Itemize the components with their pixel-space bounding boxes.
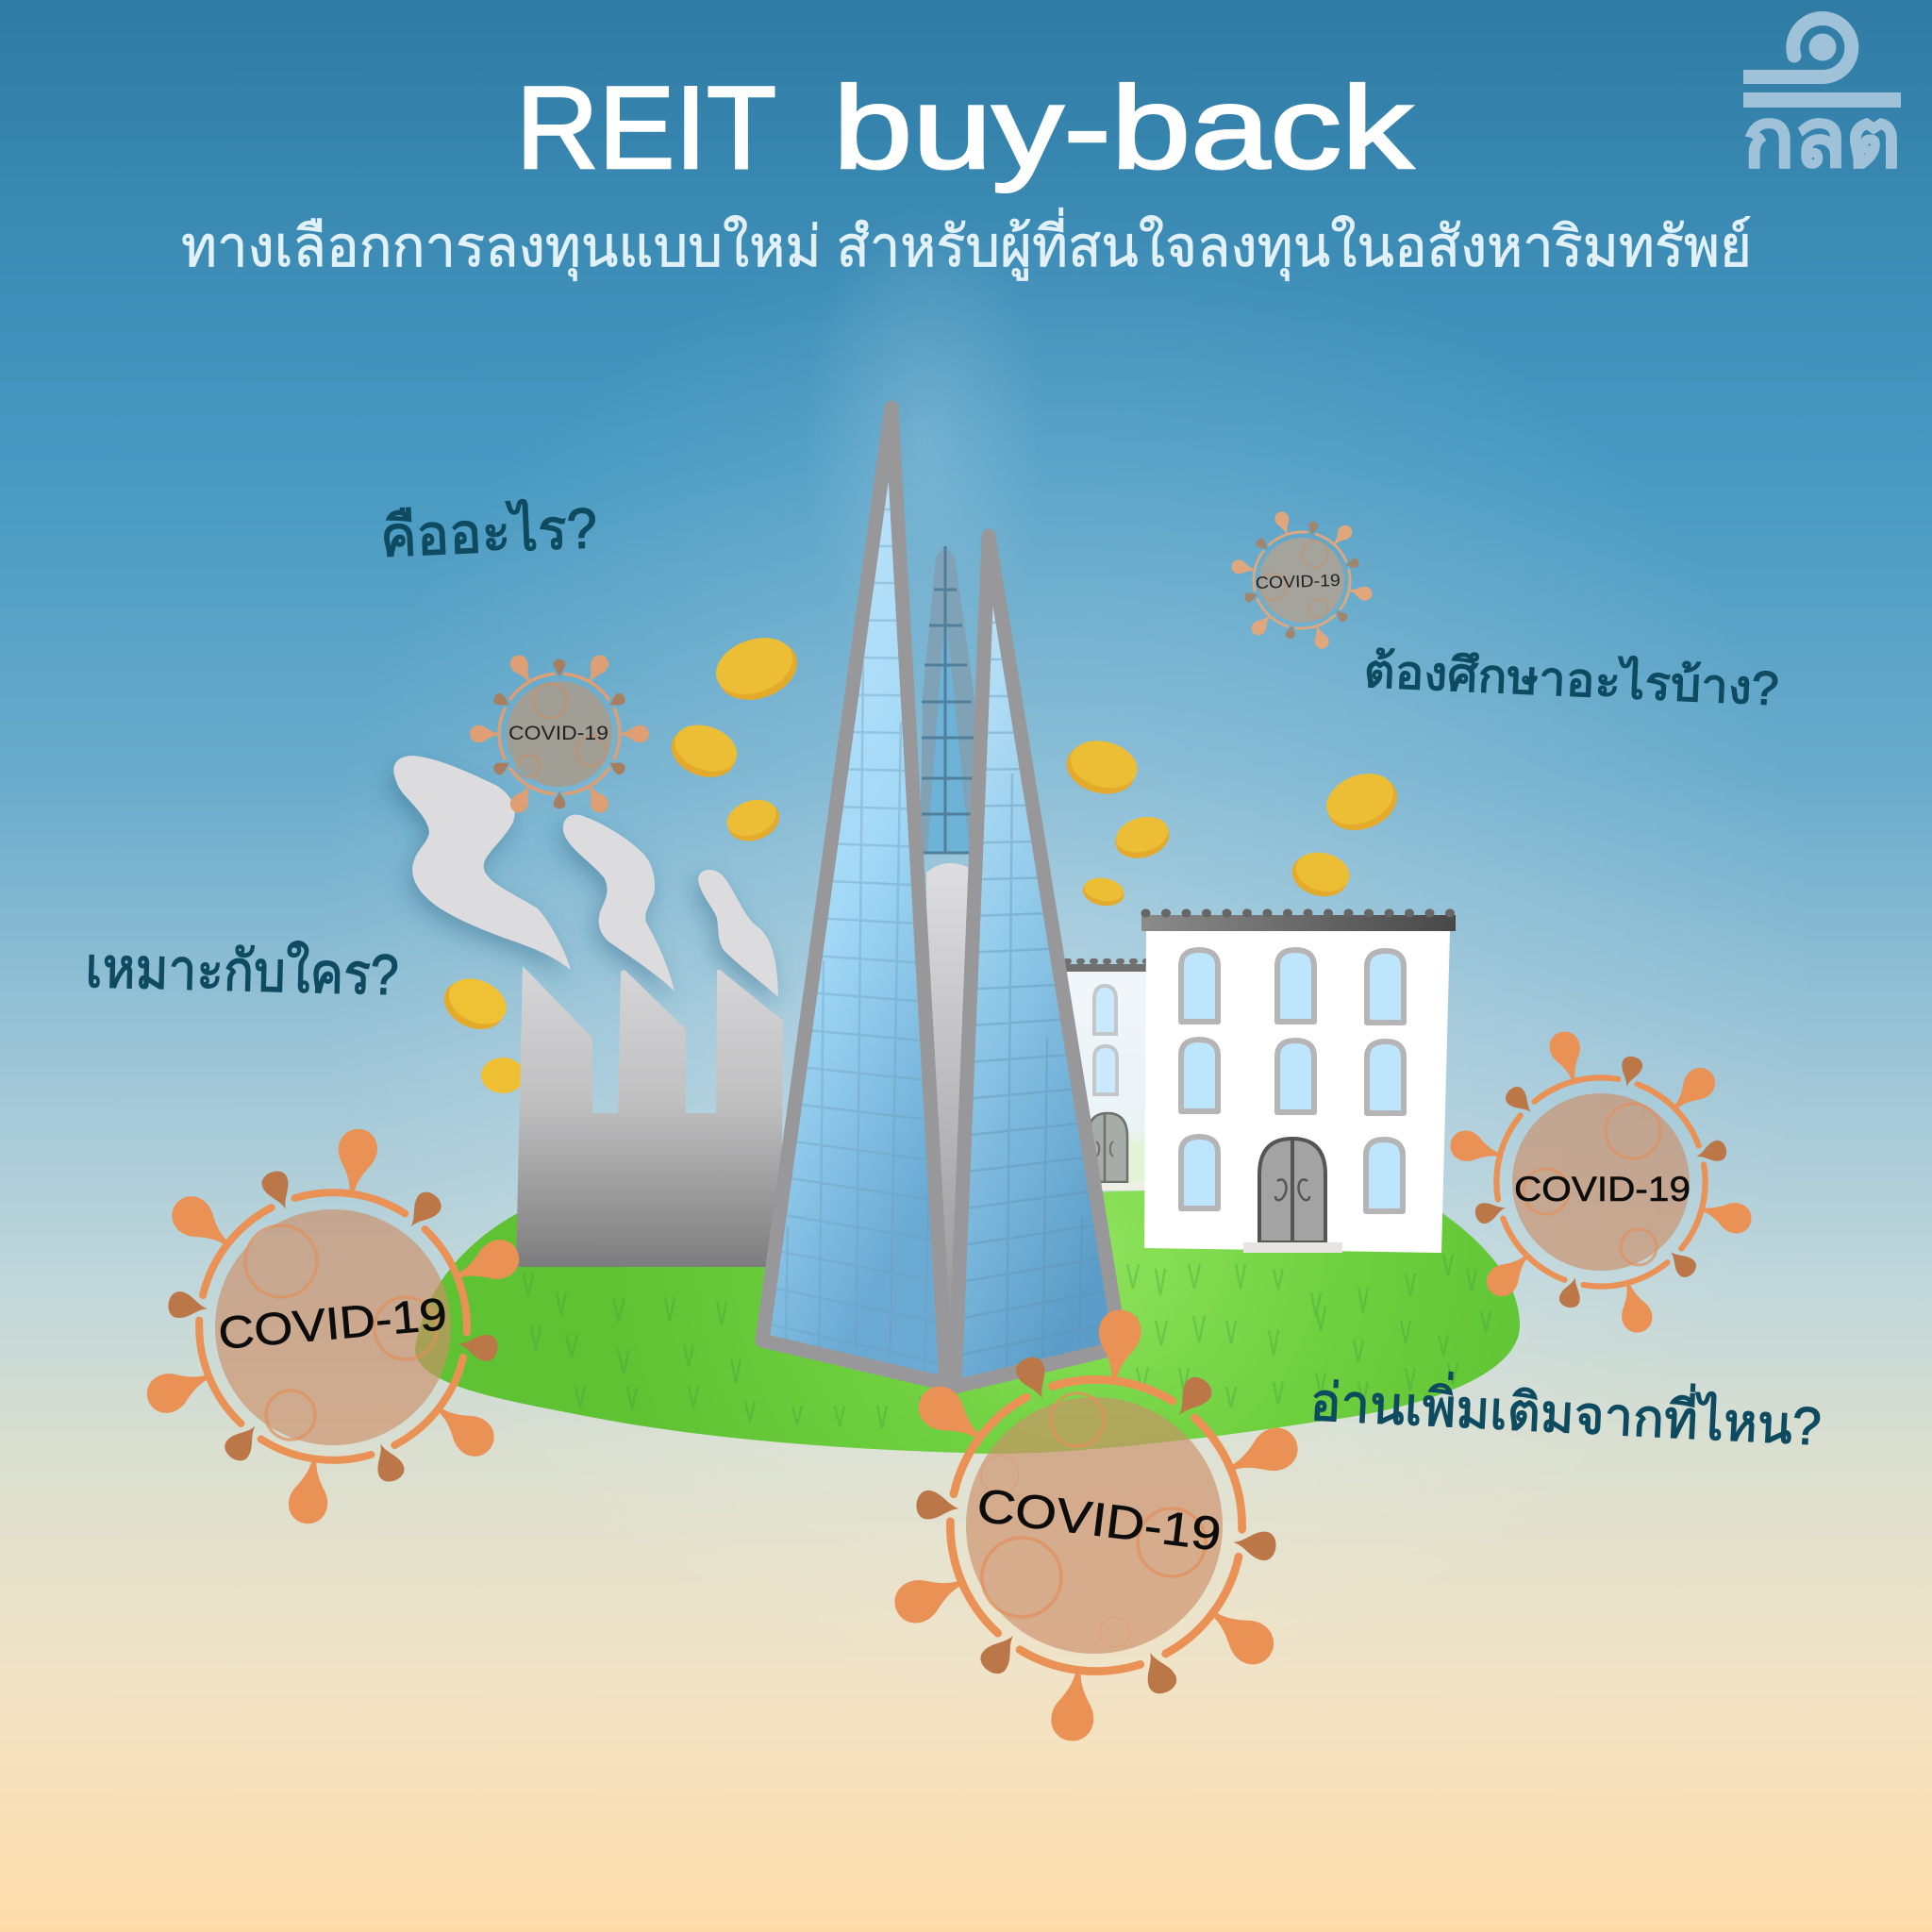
green ground with grass [415, 1184, 1520, 1454]
question: what to study: ต้องศึกษาอะไรบ้าง? [1363, 644, 1780, 715]
question: who is it for: เหมาะกับใคร? [85, 936, 399, 1007]
logo: SEC Thailand [1743, 19, 1901, 184]
virus: top right small grey: COVID-19 [1255, 571, 1341, 592]
door [1243, 1139, 1342, 1253]
subtitle: ทางเลือกการลงทุนแบบใหม่ สำหรับผู้ที่สนใจลงทุนในอสังหาริมทรัพย์ [181, 208, 1752, 281]
virus: left large: COVID-19 [216, 1290, 449, 1359]
virus: mid small grey [437, 611, 682, 857]
smoke plumes [393, 756, 778, 997]
question: what is it: คืออะไร? [379, 495, 598, 569]
title: buy-back [833, 63, 1414, 193]
virus: right [1410, 991, 1791, 1373]
coin behind factory [481, 1058, 525, 1093]
back house [1062, 961, 1147, 1191]
virus: mid small grey: COVID-19 [508, 722, 608, 744]
virus: right: COVID-19 [1514, 1170, 1690, 1208]
factory [516, 966, 783, 1267]
gold coins [436, 626, 1406, 1039]
left glass tower [745, 408, 953, 1387]
title: REIT [516, 63, 776, 193]
logo: SEC Thailand: กลต [1743, 93, 1901, 184]
back tower [920, 546, 976, 854]
main white house [1141, 913, 1456, 1253]
gray pillar behind towers [926, 863, 977, 1382]
virus: left large [107, 1102, 559, 1551]
windows [1181, 950, 1404, 1211]
question: where to read more: อ่านเพิ่มเติมจากที่ไหน? [1308, 1365, 1823, 1456]
right glass tower [943, 536, 1132, 1387]
virus: top right small grey [1211, 490, 1392, 671]
title [516, 63, 1414, 193]
virus: bottom centre large [853, 1284, 1340, 1767]
virus: bottom centre large: COVID-19 [974, 1478, 1224, 1561]
